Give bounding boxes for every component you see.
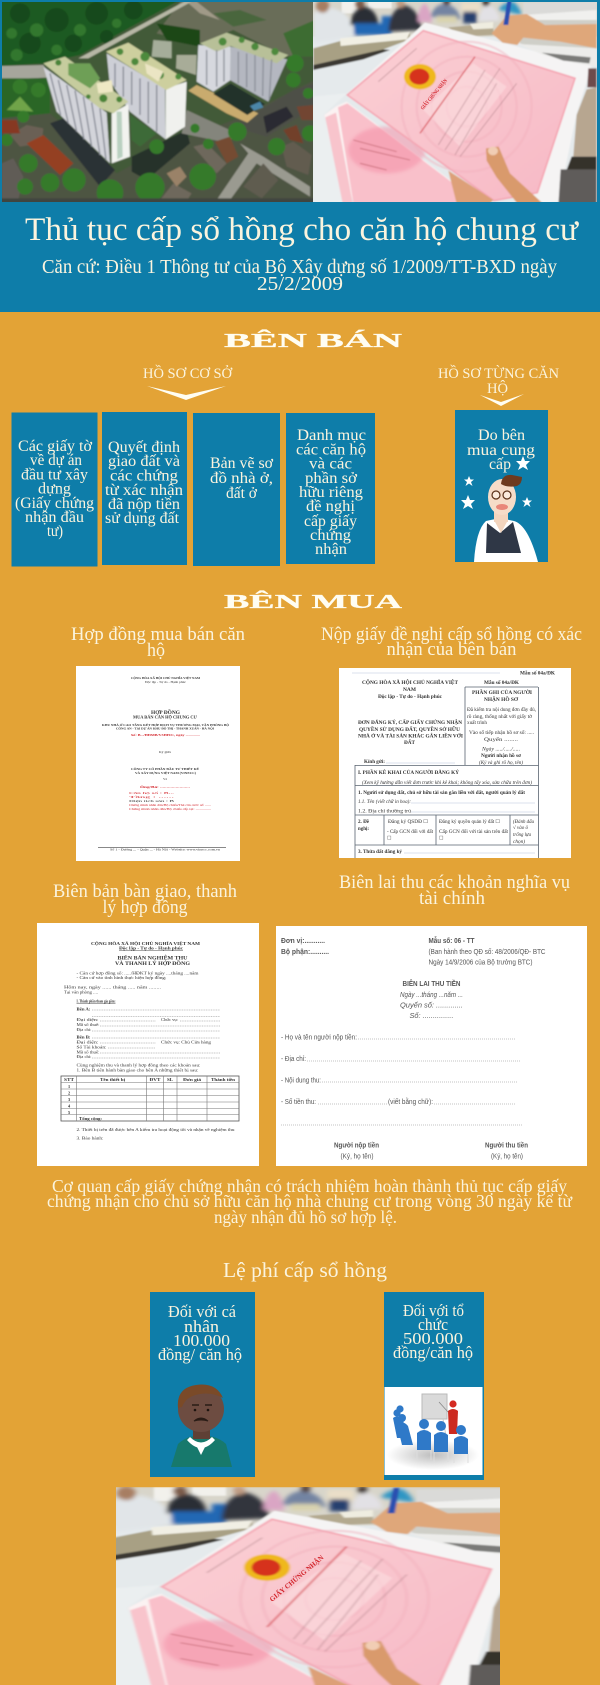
table: thiết bị: Tổng cộng: [79,1116,103,1121]
document: đơn đăng ký: 2. Đề [358,820,370,825]
document: biên bản nghiệm thu: - Căn cứ hợp đồng số: ...../HĐKT ký ngày ....tháng ....năm [76,970,199,976]
document: hợp đồng: CÔNG TY CỔ PHẦN ĐẦU TƯ THIẾT KẾ [131,766,200,771]
document: đơn đăng ký [339,668,571,858]
photo: pink certificates bottom [108,1485,527,1685]
document: hợp đồng: Ký giữa [159,750,172,754]
document: đơn đăng ký: NHẬN HỒ SƠ [484,697,518,703]
caption: biên lai thu: Biên lai thu các khoản nghĩa vụ [339,872,570,893]
document: hợp đồng: CỘNG HÒA XÃ HỘI CHỦ NGHĨA VIỆT NAM [131,675,201,680]
caption: hợp đồng mua bán căn hộ: hộ [147,640,165,661]
paragraph: thời hạn cấp giấy: chứng nhận cho chủ sở hữu căn hộ nhà chung cư trong vòng 30 ngày kể từ [47,1191,573,1211]
panel: giấy tờ dự án: (Giấy chứng [15,495,94,512]
document: biên lai thu tiền: Người thu tiền [485,1140,528,1150]
document: đơn đăng ký: NAM [403,688,416,693]
document: biên lai thu tiền: - Địa chỉ: [281,1055,306,1063]
document: biên bản nghiệm thu: I. Thành phần tham gia gồm: [76,998,116,1004]
caption: biên lai thu: tài chính [419,888,485,909]
panel: danh mục căn hộ: các căn hộ [296,442,366,458]
document: đơn đăng ký: (Xem kỹ hướng dẫn viết đơn trước khi kê khai; không tẩy xóa, sửa chữa trên đơn) [362,780,532,786]
caption: nộp giấy đề nghị: nhận của bên bán [386,639,517,660]
panel: quyết định giao đất: Quyết định [108,439,180,456]
table: thiết bị: 2 [68,1090,70,1096]
document: biên lai thu tiền: (Ban hành theo QĐ số: 48/2006/QĐ- BTC [428,947,546,956]
subheading: HỒ SƠ CƠ SỞ: HỒ SƠ CƠ SỞ [143,364,233,382]
document: hợp đồng: Diện tích sàn : B [129,799,175,803]
document: hợp đồng: Và [163,777,167,781]
panel: bản vẽ sơ đồ: Bản vẽ sơ [210,455,274,472]
document: biên lai thu tiền: (viết bằng chữ): [388,1097,433,1106]
document: đơn đăng ký: (Ký và ghi rõ họ, tên) [479,761,523,766]
photo: pink certificates: GIẤY CHỨNG NHẬN [418,77,449,111]
table: thiết bị: 1 [68,1084,70,1089]
document: đơn đăng ký: nghị: [358,827,369,832]
arrow: chevron down small [480,394,524,406]
document: biên bản nghiệm thu: - Căn cứ vào tình hình thực hiện hợp đồng; [76,975,166,980]
subtitle: 25/2/2009 [257,273,343,295]
panel: giấy tờ dự án: nhận đầu [25,509,84,526]
table: thiết bị: Thành tiền [211,1077,236,1082]
panel: phí tổ chức: chức [418,1315,448,1334]
caption: biên bản bàn giao: Biên bản bàn giao, thanh [53,881,237,902]
document: đơn đăng ký: Cấp GCN đối với tài sản trên đất [439,830,509,835]
table: thiết bị: 5 [68,1110,70,1115]
panel: giấy tờ dự án: tư) [47,523,63,540]
document: đơn đăng ký: Vào sổ tiếp nhận hồ sơ số: ..... [469,730,534,736]
caption: biên lai thu [339,872,570,909]
document: đơn đăng ký: rõ ràng, thống nhất với giấy tờ [467,715,532,720]
document: đơn đăng ký: Đăng ký QSDĐ ☐ [388,819,429,825]
paragraph: thời hạn cấp giấy: ngày nhận đủ hồ sơ hợp lệ. [214,1207,397,1227]
subheading: HỒ SƠ TỪNG CĂN HỘ: HỘ [487,380,508,397]
document: hợp đồng: Tầng : ...... [129,795,174,799]
table: thiết bị: Tên thiết bị [100,1077,126,1082]
document: biên lai thu tiền: Đơn vị:........... [281,938,325,945]
panel: phí tổ chức: 500.000 [403,1329,463,1348]
table: thiết bị: 3 [68,1097,70,1102]
document: đơn đăng ký: ☐ [439,836,444,842]
document: biên lai thu tiền: Người nộp tiền [334,1140,379,1150]
document: biên lai thu tiền: Bộ phận:.......... [281,949,329,956]
document: biên bản nghiệm thu: Hôm nay, ngày ...... tháng ..... năm ........ [64,984,161,990]
document: đơn đăng ký: Người nhận hồ sơ [481,754,521,759]
heading: BÊN BÁN: BÊN BÁN [224,328,403,352]
document: đơn đăng ký: Mẫu số 04a/ĐK [520,670,555,676]
document: biên bản nghiệm thu: Tại văn phòng .... [64,990,98,994]
document: đơn đăng ký: Đã kiểm tra nội dung đơn đầy đủ, [467,707,536,713]
panel: danh mục căn hộ: phần sở [305,470,358,487]
document: đơn đăng ký: Ngày ...../...../..... [481,748,520,752]
icon: man with glasses [474,475,538,562]
panel: phí cá nhân [150,1292,255,1477]
panel: danh mục căn hộ: chứng [310,527,351,544]
subheading: HỒ SƠ TỪNG CĂN HỘ [438,364,559,397]
subtitle: Căn cứ: Điều 1 Thông tư của Bộ Xây dựng số 1/2009/TT-BXD ngày [42,256,557,278]
photo: pink certificates bottom: GIẤY CHỨNG NHẬN [268,1554,325,1604]
document: biên bản nghiệm thu: Cùng nghiệm thu và thanh lý hợp đồng theo các khoản sau: [76,1062,200,1068]
document: đơn đăng ký: 1. Người sử dụng đất, chủ sở hữu tài sản gắn liền với đất, người quản lý đất [358,790,525,796]
document: đơn đăng ký: Độc lập - Tự do - Hạnh phúc [378,695,443,700]
document: biên bản nghiệm thu: Bên A: [76,1006,91,1012]
document: biên bản nghiệm thu: Địa chỉ: [76,1027,92,1032]
document: biên lai thu tiền: BIÊN LAI THU TIỀN [402,978,460,988]
panel: danh mục căn hộ [286,413,375,564]
panel: phí cá nhân: nhân [184,1317,219,1336]
caption: nộp giấy đề nghị [321,624,582,660]
panel: danh mục căn hộ: cấp giấy [304,513,357,530]
document: hợp đồng: Ông/Bà: ....................... [140,784,190,789]
table: thiết bị [61,1076,239,1121]
document: đơn đăng ký: (Đánh dấu [513,820,534,825]
panel: quyết định giao đất: từ xác nhận [105,482,183,499]
document: đơn đăng ký: 3. Thửa đất đăng ký [358,850,402,855]
document: đơn đăng ký: Mẫu số 04a/ĐK [484,680,519,686]
icon: man avatar [171,1385,232,1467]
title: Thủ tục cấp sổ hồng cho căn hộ chung cư [25,212,579,248]
document: biên lai thu tiền: Quyển số: ............. [400,1002,463,1010]
panel: bản vẽ sơ đồ: đồ nhà ở, [210,470,273,487]
panel: giấy tờ dự án: dựng [38,480,71,498]
document: hợp đồng [76,666,240,861]
document: biên lai thu tiền: (Ký, họ tên) [491,1154,523,1160]
icon: stars [461,456,532,509]
panel: danh mục căn hộ: và các [309,456,352,472]
document: đơn đăng ký: I. PHẦN KÊ KHAI CỦA NGƯỜI ĐĂNG KÝ [358,770,459,776]
document: hợp đồng: Căn hộ số : B... [129,791,174,795]
document: đơn đăng ký: QUYỀN SỬ DỤNG ĐẤT, QUYỀN SỞ HỮU [359,727,460,733]
document: biên bản nghiệm thu: 3. Bảo hành: [76,1136,104,1140]
arrow: chevron down [147,386,226,400]
document: biên bản nghiệm thu: CỘNG HÒA XÃ HỘI CHỦ NGHĨA VIỆT NAM [91,941,200,946]
document: hợp đồng: Số: B.../HĐMB/V3HH/C, ngày .............. [131,733,200,737]
document: biên lai thu tiền: (Ký, họ tên) [340,1154,374,1160]
document: biên bản nghiệm thu: Chức vụ: [161,1017,178,1022]
document: biên lai thu tiền: Mẫu số: 06 - TT [428,936,475,945]
document: đơn đăng ký: 1.1. Tên (viết chữ in hoa): [358,800,411,805]
document: biên bản nghiệm thu [37,923,259,1166]
document: đơn đăng ký: NHÀ Ở VÀ TÀI SẢN KHÁC GẮN LIỀN VỚI [358,732,463,740]
panel: do bên mua cung cấp: Do bên [478,427,525,444]
caption: nộp giấy đề nghị: Nộp giấy đề nghị cấp sổ hồng có xác [321,624,582,645]
document: đơn đăng ký: ☐ [387,836,392,842]
table: thiết bị: 4 [68,1104,71,1108]
document: biên lai thu tiền: Ngày ...tháng ...năm ... [400,992,463,999]
document: hợp đồng: Số 1 - Đường ... - Quận ... - Hà Nội - Website: www.vinecc.com.vn [110,848,220,852]
table: thiết bị: STT [64,1077,74,1082]
panel: phí tổ chức: Đối với tổ [403,1301,464,1320]
document: đơn đăng ký: √ vào ô [513,825,528,831]
document: biên bản nghiệm thu: Mã số thuế: [76,1050,100,1054]
panel: bản vẽ sơ đồ: đất ở [226,485,258,502]
subtitle [42,256,557,295]
document: biên bản nghiệm thu: Số Tài khoản: [76,1044,106,1050]
panel: bản vẽ sơ đồ [193,413,280,566]
panel: danh mục căn hộ: Danh mục [297,427,366,444]
document: biên lai thu tiền: Ngày 14/9/2006 của Bộ trưởng BTC) [428,958,532,966]
document: biên lai thu tiền: - Họ và tên người nộp tiền: [281,1032,357,1042]
document: đơn đăng ký: trống lựa [513,833,531,838]
caption: hợp đồng mua bán căn hộ: Hợp đồng mua bán căn [71,624,245,645]
document: biên bản nghiệm thu: BIÊN BẢN NGHIỆM THU [118,956,188,962]
document: đơn đăng ký: xuất trình [467,721,488,726]
document: biên bản nghiệm thu: 1. Bên B tiến hành bàn giao cho bên A những thiết bị sau: [76,1068,198,1072]
panel: danh mục căn hộ: đề nghị [306,498,356,515]
document: hợp đồng: HỢP ĐỒNG [151,710,180,716]
document: đơn đăng ký: 1.2. Địa chỉ thường trú [358,810,412,814]
panel: danh mục căn hộ: hữu riêng [299,484,363,501]
panel: phí cá nhân: Đối với cá [168,1302,237,1321]
document: biên bản nghiệm thu: VÀ THANH LÝ HỢP ĐỒNG [115,961,190,967]
document: hợp đồng: CÔNG AN - TẠI DỰ ÁN KHU ĐÔ THỊ - THANH XUÂN - HÀ NỘI [116,726,215,730]
panel: phí cá nhân: đồng/ căn hộ [158,1345,242,1364]
document: đơn đăng ký: Quyển ........ [484,737,518,743]
photo: apartment complex aerial view [0,0,318,206]
table: thiết bị: Đơn giá [183,1077,202,1082]
document: biên bản nghiệm thu: Bên B: [76,1034,91,1040]
panel: giấy tờ dự án: Các giấy tờ [18,438,93,455]
panel: giấy tờ dự án: đầu tư xây [21,466,88,484]
panel: do bên mua cung cấp: cấp [489,456,511,473]
subheading: HỒ SƠ TỪNG CĂN HỘ: HỒ SƠ TỪNG CĂN [438,364,559,382]
icon: meeting of blue figures [384,1387,482,1475]
panel: do bên mua cung cấp [455,410,548,562]
panel: danh mục căn hộ: nhận [315,541,347,558]
panel: phí tổ chức [384,1292,484,1480]
table: thiết bị: ĐVT [150,1077,161,1082]
document: biên bản nghiệm thu: 2. Thiết bị trên đã được bên A kiểm tra hoạt động tốt và nhận về nghiệm thu [76,1127,236,1132]
panel: giấy tờ dự án [12,412,98,566]
document: biên bản nghiệm thu: Độc lập - Tự do - Hạnh phúc [119,946,183,950]
document: biên bản nghiệm thu: Đại diện: [76,1017,98,1022]
header panel [0,0,600,312]
document: hợp đồng: MUA BÁN CĂN HỘ CHUNG CƯ [133,714,198,720]
heading: lệ phí: Lệ phí cấp sổ hồng [223,1258,388,1282]
document: đơn đăng ký: CỘNG HÒA XÃ HỘI CHỦ NGHĨA VIỆT [362,680,459,686]
panel: giấy tờ dự án: về dự án [30,452,82,469]
document: hợp đồng: Độc lập - Tự do - Hạnh phúc [145,680,187,684]
panel: quyết định giao đất [102,412,187,565]
caption: biên bản bàn giao [53,881,237,918]
document: biên lai thu tiền: - Nội dung thu: [281,1078,321,1084]
paragraph: thời hạn cấp giấy [47,1176,573,1227]
panel: phí cá nhân: 100.000 [173,1331,230,1350]
photo: pink certificates [310,0,600,207]
document: đơn đăng ký: PHẦN GHI CỦA NGƯỜI [472,690,532,696]
caption: hợp đồng mua bán căn hộ [71,624,245,661]
document: biên bản nghiệm thu: Chức vụ: Chủ Cửa hàng [161,1040,212,1044]
panel: phí tổ chức: đồng/căn hộ [393,1343,473,1362]
document: biên bản nghiệm thu: Địa chỉ: [76,1054,92,1059]
document: biên lai thu tiền [276,926,587,1166]
document: biên lai thu tiền: Số: ............... [410,1012,454,1020]
document: đơn đăng ký: Đăng ký quyền quản lý đất ☐ [439,819,501,825]
panel: do bên mua cung cấp: mua cung [467,442,535,459]
document: biên bản nghiệm thu: Đại diện: [76,1040,98,1044]
document: hợp đồng: VÀ XÂY DỰNG VIỆT NAM (VINECC) [135,770,196,775]
heading: BÊN MUA: BÊN MUA [224,589,403,613]
document: đơn đăng ký: chọn) [513,840,525,845]
table: thiết bị: SL [167,1077,173,1082]
panel: quyết định giao đất: sử dụng đất [105,510,180,527]
panel: quyết định giao đất: giao đất và [108,453,180,470]
document: biên bản nghiệm thu: Mã số thuế: [76,1022,100,1027]
document: hợp đồng: KHU NHÀ Ở CAO TẦNG KẾT HỢP DỊCH VỤ THƯƠNG MẠI, VĂN PHÒNG BỘ [102,722,229,727]
document: đơn đăng ký: ĐƠN ĐĂNG KÝ, CẤP GIẤY CHỨNG NHẬN [358,720,462,726]
document: biên lai thu tiền: - Số tiền thu: [281,1097,316,1106]
document: hợp đồng: Chứng minh nhân dân/Hộ chiếu cấp tại: ............... [129,807,211,811]
paragraph: thời hạn cấp giấy: Cơ quan cấp giấy chứng nhận có trách nhiệm hoàn thành thủ tục cấp giấy [52,1176,567,1196]
panel: quyết định giao đất: các chứng [110,468,178,484]
document: hợp đồng: Chứng minh nhân dân/Hộ chiếu/Thẻ căn cước số: ...... [129,803,211,807]
document: đơn đăng ký: - Cấp GCN đối với đất [387,830,434,835]
caption: biên bản bàn giao: lý hợp đồng [102,897,188,918]
document: đơn đăng ký: Kính gửi: [364,760,385,765]
panel: quyết định giao đất: đã nộp tiền [108,496,180,513]
document: đơn đăng ký: ĐẤT [404,740,416,746]
